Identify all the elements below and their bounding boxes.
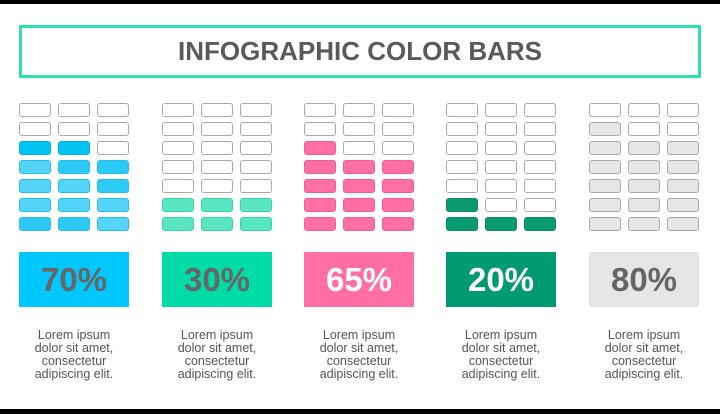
text: dolor sit amet, bbox=[320, 341, 398, 355]
text: consectetur bbox=[185, 354, 249, 368]
panel: 20% dark green bbox=[446, 103, 556, 381]
panel: 65% pink bbox=[304, 103, 414, 381]
title bbox=[19, 25, 701, 78]
text bbox=[35, 328, 113, 381]
text: adipiscing elit. bbox=[605, 367, 683, 381]
percent box bbox=[446, 252, 556, 307]
percent box bbox=[162, 252, 272, 307]
percent box: 70% bbox=[41, 261, 107, 298]
text: adipiscing elit. bbox=[178, 367, 256, 381]
text: Lorem ipsum bbox=[608, 328, 680, 342]
text: adipiscing elit. bbox=[35, 367, 113, 381]
panel: 30% teal bbox=[162, 103, 272, 381]
title: INFOGRAPHIC COLOR BARS bbox=[178, 36, 542, 66]
text bbox=[320, 328, 398, 381]
percent box bbox=[304, 252, 414, 307]
text: Lorem ipsum bbox=[38, 328, 110, 342]
text bbox=[178, 328, 256, 381]
percent box bbox=[19, 252, 129, 307]
text: consectetur bbox=[42, 354, 106, 368]
panel: 80% gray bbox=[589, 103, 699, 381]
text bbox=[605, 328, 683, 381]
percent box bbox=[589, 252, 699, 307]
text: consectetur bbox=[469, 354, 533, 368]
text: Lorem ipsum bbox=[465, 328, 537, 342]
percent box: 65% bbox=[326, 261, 392, 298]
text: consectetur bbox=[327, 354, 391, 368]
text: Lorem ipsum bbox=[181, 328, 253, 342]
panel: 70% blue bbox=[19, 103, 129, 381]
text: dolor sit amet, bbox=[605, 341, 683, 355]
text: dolor sit amet, bbox=[462, 341, 540, 355]
text: Lorem ipsum bbox=[323, 328, 395, 342]
text: adipiscing elit. bbox=[320, 367, 398, 381]
percent box: 30% bbox=[184, 261, 250, 298]
percent box: 20% bbox=[468, 261, 534, 298]
percent box: 80% bbox=[611, 261, 677, 298]
text bbox=[462, 328, 540, 381]
text: consectetur bbox=[612, 354, 676, 368]
text: adipiscing elit. bbox=[462, 367, 540, 381]
text: dolor sit amet, bbox=[35, 341, 113, 355]
text: dolor sit amet, bbox=[178, 341, 256, 355]
